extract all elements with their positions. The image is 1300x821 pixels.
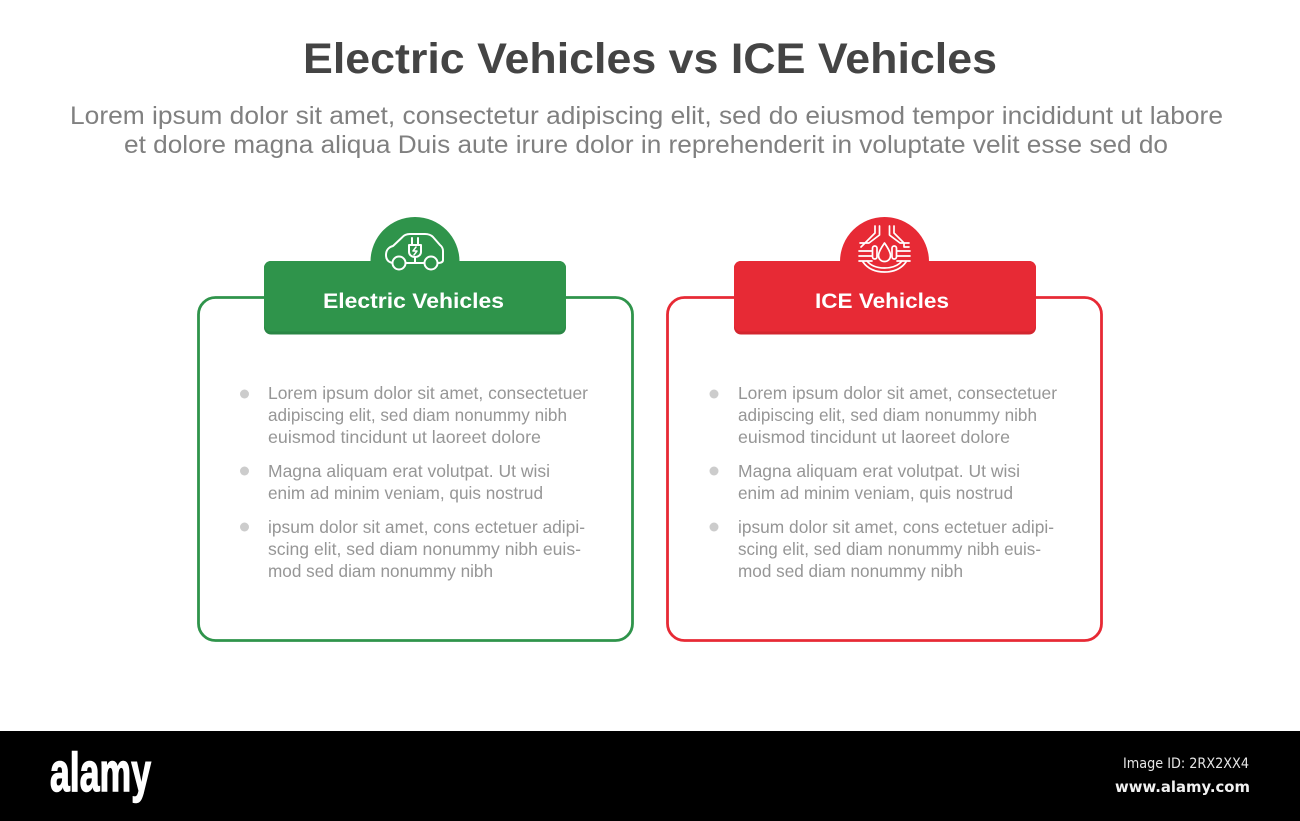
header tab: ICE vehicles: [734, 217, 1036, 334]
bullet list: electric vehicles: mod sed diam nonummy nibh: [268, 561, 493, 581]
bullet list: electric vehicles: scing elit, sed diam nonummy nibh euis-: [268, 539, 581, 559]
bullet list: ICE vehicles: Magna aliquam erat volutpat. Ut wisi: [738, 461, 1020, 481]
bullet list: ICE vehicles: Lorem ipsum dolor sit amet, consectetuer: [738, 383, 1057, 403]
header tab: electric vehicles: [264, 217, 566, 334]
bullet list: ICE vehicles: adipiscing elit, sed diam nonummy nibh: [738, 405, 1037, 425]
icon: engine pipes with oil drop: [859, 226, 910, 272]
bullet list: ICE vehicles: enim ad minim veniam, quis nostrud: [738, 483, 1013, 503]
panel outline: electric vehicles: [198, 298, 632, 640]
panel: ICE vehicles: [668, 217, 1102, 640]
icon: electric car with plug: [386, 234, 443, 270]
bullet list: electric vehicles: ipsum dolor sit amet, cons ectetuer adipi-: [268, 517, 585, 537]
bullet list: electric vehicles: enim ad minim veniam, quis nostrud: [268, 483, 543, 503]
heading: ICE vehicles: ICE Vehicles: [815, 290, 949, 313]
website address: www.alamy.com: [1115, 778, 1250, 796]
panel outline: ICE vehicles: [668, 298, 1102, 640]
bullet list: electric vehicles: euismod tincidunt ut laoreet dolore: [268, 427, 541, 447]
panel: electric vehicles: [198, 217, 632, 640]
heading: electric vehicles: Electric Vehicles: [323, 290, 504, 313]
title: Electric Vehicles vs ICE Vehicles: [303, 35, 997, 83]
bullet list: electric vehicles: adipiscing elit, sed diam nonummy nibh: [268, 405, 567, 425]
subtitle text: Lorem ipsum dolor sit amet, consectetur adipiscing elit, sed do eiusmod tempor incididunt ut labore: [70, 102, 1223, 130]
bullet list: electric vehicles: [240, 383, 588, 581]
bullet list: ICE vehicles: ipsum dolor sit amet, cons ectetuer adipi-: [738, 517, 1054, 537]
bullet list: ICE vehicles: mod sed diam nonummy nibh: [738, 561, 963, 581]
logo wordmark: alamy: [50, 741, 151, 803]
image id: Image ID: 2RX2XX4: [1123, 756, 1249, 772]
subtitle text: et dolore magna aliqua Duis aute irure dolor in reprehenderit in voluptate velit esse sed do: [124, 131, 1168, 159]
bullet list: ICE vehicles: scing elit, sed diam nonummy nibh euis-: [738, 539, 1041, 559]
bullet list: ICE vehicles: euismod tincidunt ut laoreet dolore: [738, 427, 1010, 447]
bullet list: electric vehicles: Lorem ipsum dolor sit amet, consectetuer: [268, 383, 588, 403]
subtitle text: [70, 102, 1223, 159]
watermark footer bar: [0, 731, 1300, 821]
bullet list: electric vehicles: Magna aliquam erat volutpat. Ut wisi: [268, 461, 550, 481]
bullet list: ICE vehicles: [710, 383, 1057, 581]
